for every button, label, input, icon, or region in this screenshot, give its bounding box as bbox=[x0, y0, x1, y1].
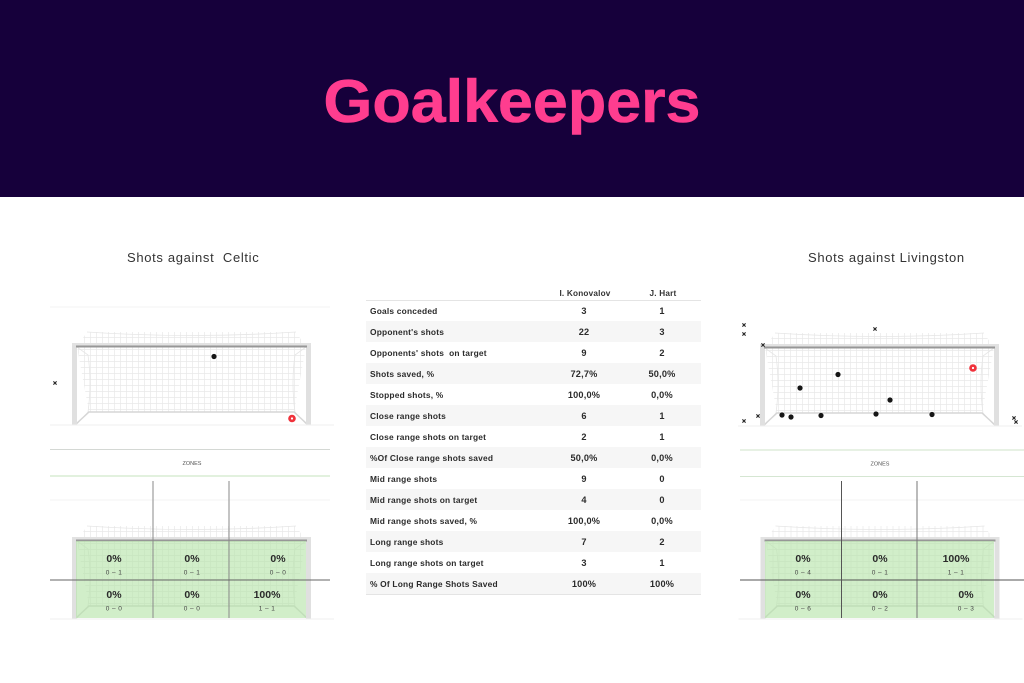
zone values bbox=[106, 553, 286, 612]
zone values: 0% bbox=[184, 589, 200, 601]
zone values: 0% bbox=[795, 589, 811, 601]
table header: I. Konovalov bbox=[559, 289, 611, 298]
panel: Celtic shot map bbox=[50, 307, 334, 425]
row: close range on target: 1 bbox=[659, 432, 665, 442]
goal conceded bbox=[969, 364, 977, 372]
row: mid range shots: 9 bbox=[581, 474, 587, 484]
row: shots saved bbox=[370, 369, 676, 379]
zone values: 0 – 2 bbox=[872, 606, 888, 612]
row: mid range saved: Mid range shots saved, % bbox=[370, 516, 478, 526]
row: stopped shots: Stopped shots, % bbox=[370, 390, 444, 400]
row: mid range saved: 100,0% bbox=[568, 516, 600, 526]
row: goals conceded bbox=[370, 306, 665, 316]
row: opponent's shots: 3 bbox=[659, 327, 665, 337]
row: shots on target: 9 bbox=[581, 348, 587, 358]
zone values: 0% bbox=[872, 553, 888, 565]
row: long range saved bbox=[370, 579, 674, 589]
row: close range saved: %Of Close range shots saved bbox=[370, 453, 493, 463]
row: stopped shots: 0,0% bbox=[651, 390, 673, 400]
zone values: 0% bbox=[958, 589, 974, 601]
row: shots on target bbox=[370, 348, 665, 358]
zone values: 0 – 0 bbox=[106, 606, 122, 612]
row: goals conceded: 1 bbox=[659, 306, 665, 316]
panel: Celtic zones bbox=[50, 450, 334, 619]
row: long range shots: 7 bbox=[581, 537, 587, 547]
row: mid range shots: 0 bbox=[659, 474, 665, 484]
shot on target bbox=[211, 354, 217, 359]
row: goals conceded: 3 bbox=[581, 306, 587, 316]
zone values: 0 – 1 bbox=[184, 570, 200, 576]
row: mid range on target bbox=[370, 495, 665, 505]
row: mid range saved bbox=[370, 516, 673, 526]
row: close range saved bbox=[370, 453, 673, 463]
zone values: 0 – 0 bbox=[184, 606, 200, 612]
row: close range saved: 50,0% bbox=[570, 453, 598, 463]
row: mid range saved: 0,0% bbox=[651, 516, 673, 526]
row: goals conceded: Goals conceded bbox=[370, 306, 438, 316]
row: mid range shots: Mid range shots bbox=[370, 474, 437, 484]
row: opponent's shots: 22 bbox=[579, 327, 589, 337]
zones label: ZONES bbox=[183, 461, 202, 467]
row: stopped shots bbox=[370, 390, 673, 400]
row: stopped shots: 100,0% bbox=[568, 390, 600, 400]
row: mid range shots bbox=[370, 474, 665, 484]
row: opponent's shots: Opponent's shots bbox=[370, 327, 444, 337]
zone values: 0% bbox=[872, 589, 888, 601]
zone values: 0 – 6 bbox=[795, 606, 811, 612]
zone values: 0 – 1 bbox=[106, 570, 122, 576]
row: mid range on target: 4 bbox=[581, 495, 587, 505]
row: shots saved: Shots saved, % bbox=[370, 369, 435, 379]
row: long range on target: 3 bbox=[581, 558, 587, 568]
zone values: 0% bbox=[106, 589, 122, 601]
row: long range shots bbox=[370, 537, 665, 547]
row: shots saved: 72,7% bbox=[570, 369, 598, 379]
row: close range on target: 2 bbox=[581, 432, 587, 442]
zone values: 0 – 0 bbox=[270, 570, 286, 576]
zone values: 1 – 1 bbox=[948, 570, 964, 576]
row: shots on target: Opponents' shots on target bbox=[370, 348, 487, 358]
row: long range shots: Long range shots bbox=[370, 537, 444, 547]
zones label: ZONES bbox=[871, 462, 890, 468]
row: shots on target: 2 bbox=[659, 348, 665, 358]
row: shots saved: 50,0% bbox=[648, 369, 676, 379]
heading: shots against Celtic: Shots against Celtic bbox=[127, 250, 259, 265]
zone values: 0% bbox=[795, 553, 811, 565]
row: close range shots: 6 bbox=[581, 411, 587, 421]
table header: J. Hart bbox=[650, 289, 677, 298]
missed shot bbox=[53, 381, 57, 385]
goal conceded bbox=[288, 415, 296, 422]
heading: shots against Livingston: Shots against Livingston bbox=[808, 250, 965, 265]
zone values: 0 – 1 bbox=[872, 570, 888, 576]
row: long range saved: % Of Long Range Shots Saved bbox=[370, 579, 498, 589]
zone values bbox=[795, 553, 974, 612]
zone values: 0 – 3 bbox=[958, 606, 974, 612]
row: close range shots: Close range shots bbox=[370, 411, 446, 421]
row: close range saved: 0,0% bbox=[651, 453, 673, 463]
row: opponent's shots bbox=[370, 327, 665, 337]
zone values: 0 – 4 bbox=[795, 570, 811, 576]
row: mid range on target: 0 bbox=[659, 495, 665, 505]
zone values: 0% bbox=[106, 553, 122, 565]
zone values: 0% bbox=[184, 553, 200, 565]
row: long range on target: Long range shots on target bbox=[370, 558, 484, 568]
zone values: 100% bbox=[943, 553, 970, 565]
missed shots bbox=[742, 323, 1018, 424]
row: long range on target bbox=[370, 558, 665, 568]
shots on target bbox=[779, 372, 935, 420]
row: close range on target: Close range shots on target bbox=[370, 432, 486, 442]
row: long range shots: 2 bbox=[659, 537, 665, 547]
zone values: 1 – 1 bbox=[259, 606, 275, 612]
row: long range on target: 1 bbox=[659, 558, 665, 568]
panel: Livingston zones bbox=[738, 450, 1024, 619]
row: long range saved: 100% bbox=[572, 579, 596, 589]
panel: comparison table bbox=[366, 289, 701, 594]
title banner bbox=[0, 0, 1024, 197]
row: close range shots bbox=[370, 411, 665, 421]
title: Goalkeepers bbox=[324, 68, 700, 135]
table header bbox=[559, 289, 677, 298]
row: close range shots: 1 bbox=[659, 411, 665, 421]
row: mid range on target: Mid range shots on target bbox=[370, 495, 477, 505]
zone values: 0% bbox=[270, 553, 286, 565]
panel: Livingston shot map bbox=[738, 323, 1022, 426]
row: close range on target bbox=[370, 432, 665, 442]
zone values: 100% bbox=[254, 589, 281, 601]
row: long range saved: 100% bbox=[650, 579, 674, 589]
